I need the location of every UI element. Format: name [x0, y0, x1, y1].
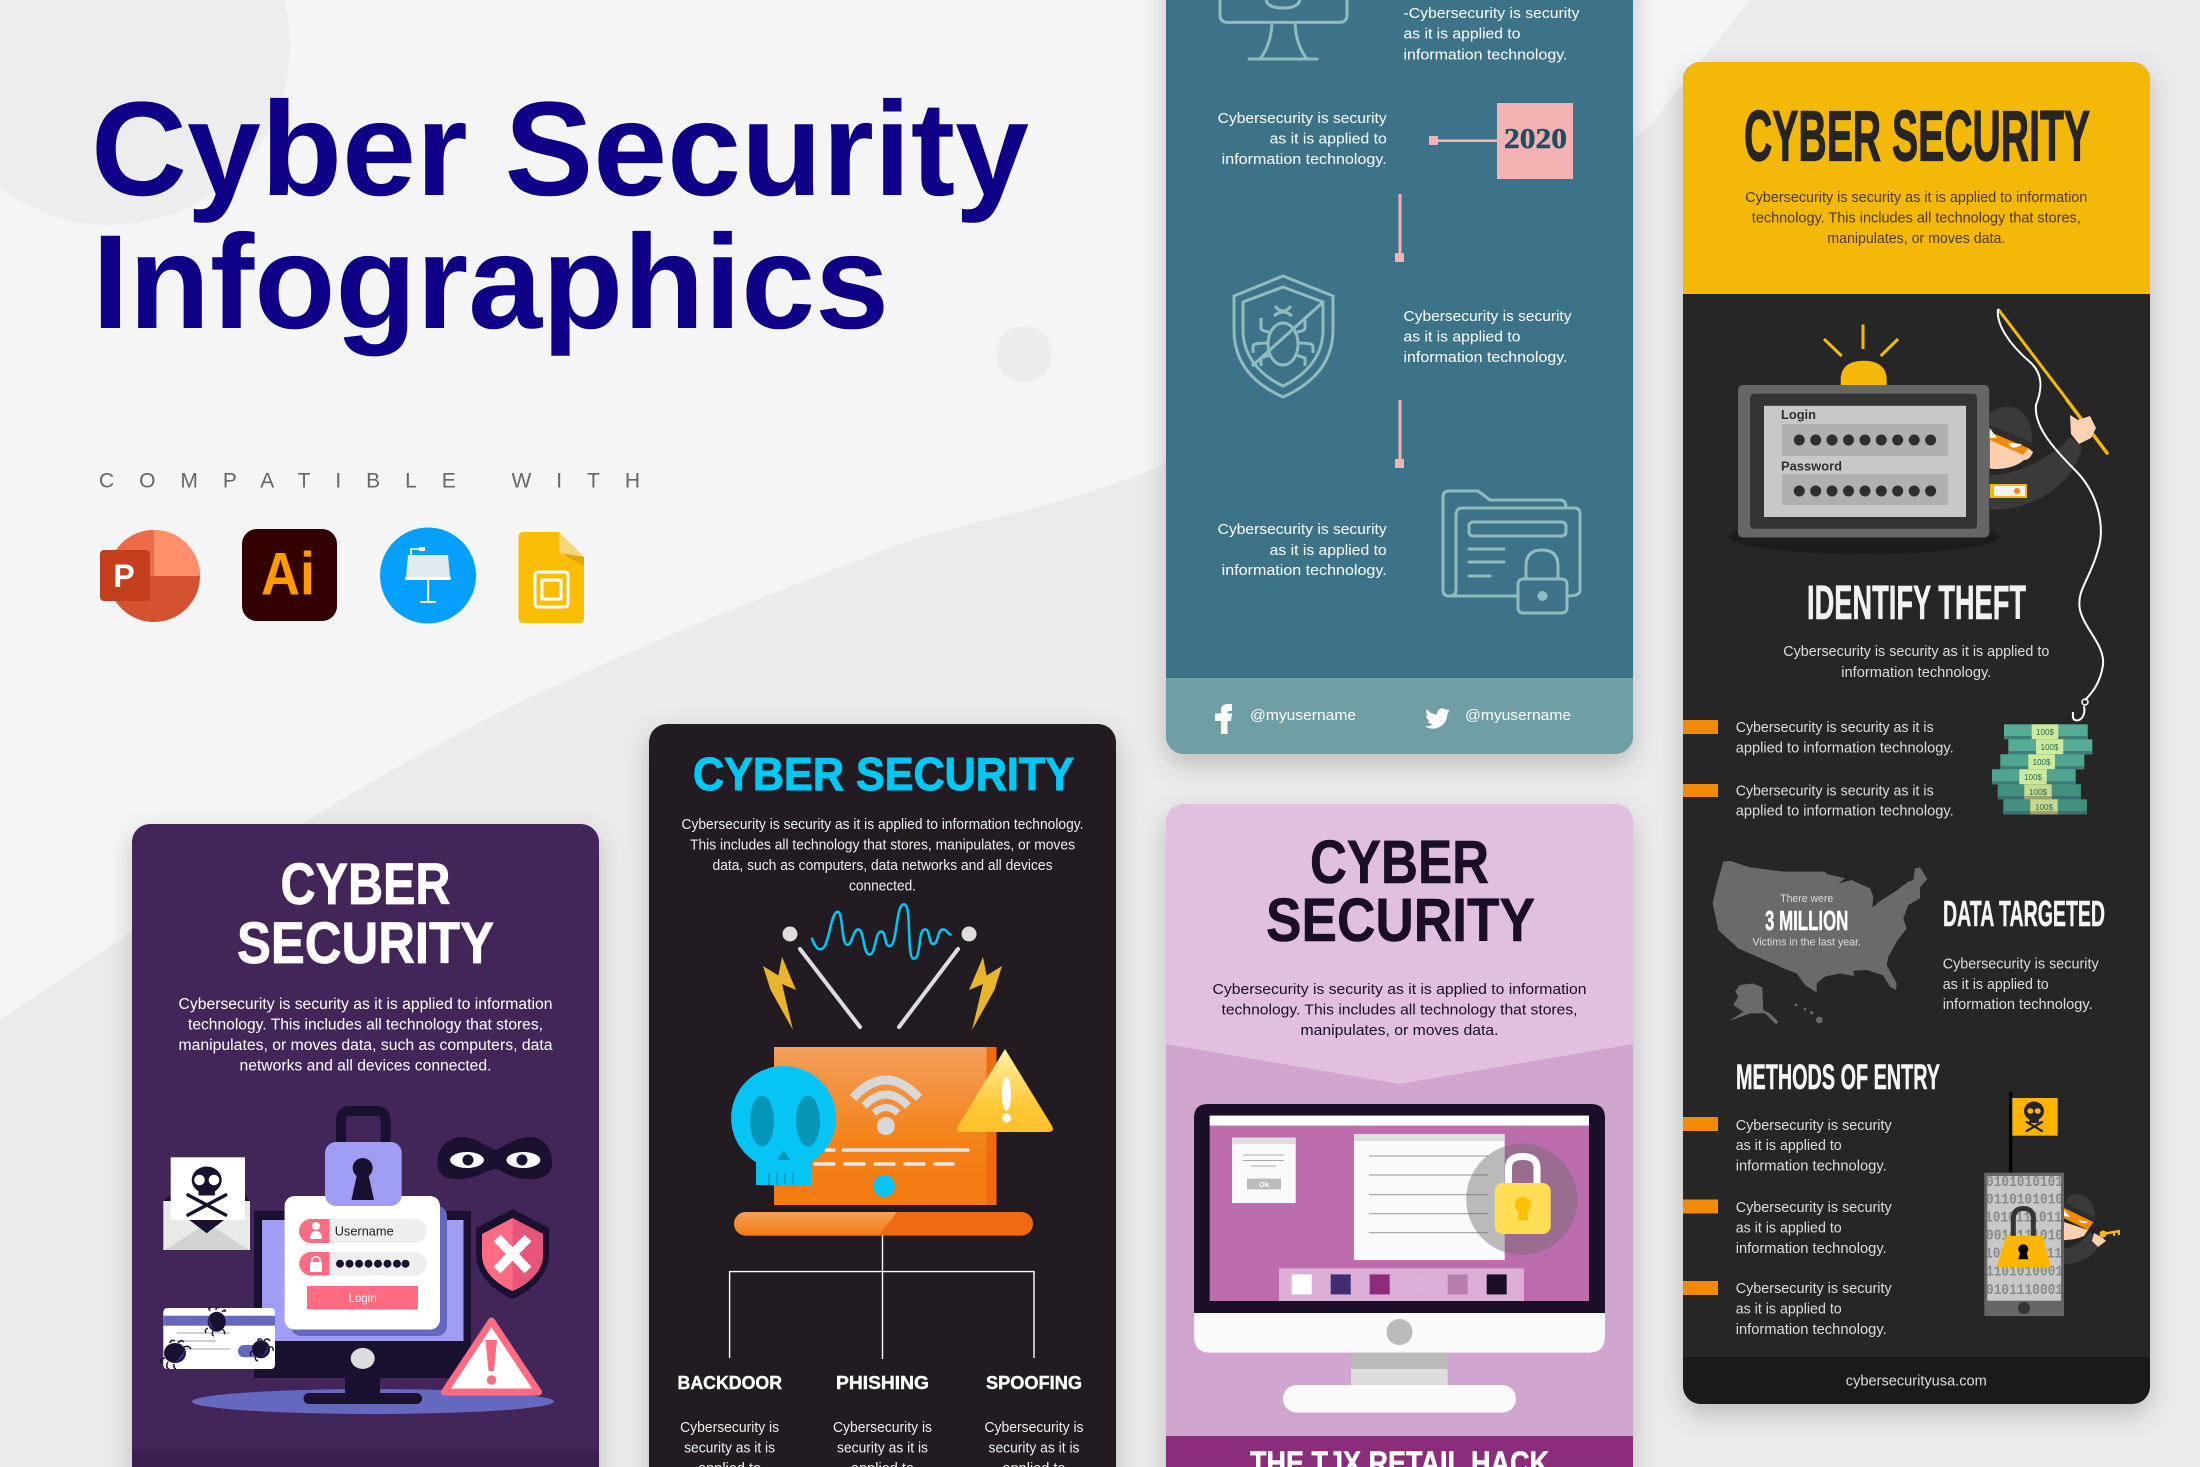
text: pink card intro: technology. This includes all technology that stores, — [1222, 1002, 1578, 1018]
bullet list: methods: information technology. — [1736, 1240, 1887, 1257]
icon: facebook — [1215, 704, 1232, 734]
illustration: locked phone: 0110101010 — [1986, 1192, 2063, 1208]
icon: PowerPoint — [100, 530, 200, 622]
column: phishing: security as it is — [837, 1441, 928, 1457]
illustration: money stacks: 100$ — [2040, 742, 2059, 752]
panel: pink card — [1166, 800, 1633, 1467]
icon: shield — [476, 1209, 549, 1299]
icon: Google Slides — [518, 532, 584, 623]
map: united states: Victims in the last year. — [1752, 937, 1861, 949]
text: pink card intro: Cybersecurity is security as it is applied to information — [1212, 981, 1586, 998]
text: data targeted — [1943, 956, 2099, 1013]
connector 1 — [1395, 194, 1404, 262]
bullet list: theft: applied to information technology. — [1736, 803, 1954, 820]
illustration: monitor with login — [192, 1111, 554, 1414]
text: teal step 3: information technology. — [1404, 350, 1568, 366]
illustration: locked phone: 0101010101 — [1986, 1175, 2063, 1191]
illustration: locked phone: 1010111111 — [1985, 1247, 2062, 1263]
icon: Illustrator: Ai — [261, 540, 315, 608]
text: purple card intro: networks and all devices connected. — [240, 1058, 492, 1074]
illustration: desktop monitor — [1194, 1104, 1605, 1413]
icon: Keynote — [380, 528, 476, 624]
window: document — [1354, 1134, 1505, 1260]
column: backdoor: security as it is — [684, 1441, 775, 1457]
text: pink card intro: manipulates, or moves data. — [1300, 1022, 1498, 1039]
text: twitter handle: @myusername — [1465, 708, 1571, 724]
illustration: login tablet: Password — [1781, 458, 1842, 474]
icon: warning triangle — [444, 1321, 538, 1392]
panel: teal card — [1166, 0, 1633, 758]
illustration: money stacks: 100$ — [2024, 772, 2042, 782]
text: teal step 2: Cybersecurity is security — [1218, 111, 1388, 127]
heading: dark card: CYBER SECURITY — [693, 748, 1074, 800]
dialog: ok box — [1232, 1138, 1296, 1203]
map: united states: 3 MILLION — [1765, 905, 1848, 936]
icon: locked folder — [1443, 491, 1580, 613]
icon: padlock — [1466, 1144, 1577, 1255]
compatible with label: COMPATIBLE WITH — [99, 470, 640, 492]
column: backdoor: BACKDOOR — [678, 1372, 782, 1393]
illustration: monitor with login: Username — [335, 1224, 394, 1239]
connector 2 — [1395, 400, 1404, 468]
illustration: money stacks: 100$ — [2032, 757, 2051, 767]
bullet list: methods: information technology. — [1736, 1158, 1887, 1175]
text: identify theft — [1783, 643, 2049, 681]
text: data targeted: information technology. — [1943, 996, 2093, 1013]
title — [91, 75, 1029, 357]
illustration: money stacks: 100$ — [2035, 802, 2053, 812]
column: spoofing — [984, 1372, 1084, 1467]
title: Cyber Security — [91, 75, 1029, 224]
heading: pink card: CYBER — [1310, 828, 1489, 896]
text: teal step 3: Cybersecurity is security — [1404, 309, 1572, 325]
text: yellow intro: technology. This includes all technology that stores, — [1752, 209, 2081, 226]
heading: pink card: SECURITY — [1266, 886, 1535, 954]
palette bar — [1279, 1268, 1524, 1301]
title: Infographics — [92, 208, 889, 357]
dialog: ok box: Ok — [1259, 1180, 1270, 1189]
text: teal step 4: information technology. — [1222, 563, 1387, 579]
icon: shield with bug — [1234, 276, 1333, 397]
icon: poison email — [163, 1157, 250, 1250]
bullet list: theft: applied to information technology. — [1736, 739, 1954, 756]
bullet list: methods: as it is applied to — [1736, 1300, 1842, 1317]
illustration: thief with key — [2064, 1194, 2120, 1264]
heading: methods of entry: METHODS OF ENTRY — [1736, 1058, 1940, 1097]
icon: yellow warning — [957, 1049, 1053, 1132]
bullet list: methods: Cybersecurity is security — [1736, 1199, 1892, 1216]
text: teal step 4 — [1218, 522, 1388, 579]
illustration: locked phone: 0010111010 — [1986, 1228, 2063, 1244]
bullet list: methods: Cybersecurity is security — [1736, 1280, 1892, 1297]
illustration: money stacks — [1992, 724, 2092, 814]
illustration: alarm light — [1824, 324, 1898, 385]
text: data targeted: as it is applied to — [1943, 976, 2049, 993]
text: data targeted: Cybersecurity is security — [1943, 956, 2099, 973]
illustration: locked phone — [1984, 1173, 2064, 1316]
text: dark card intro: data, such as computers, data networks and all devices — [712, 858, 1052, 874]
map: united states: There were — [1780, 893, 1833, 905]
column: backdoor: Cybersecurity is — [680, 1420, 779, 1436]
text: purple card intro — [178, 996, 553, 1074]
text: teal step 3 — [1404, 309, 1572, 366]
bullet list: methods: Cybersecurity is security — [1736, 1117, 1892, 1134]
icon: bandit mask — [437, 1137, 552, 1179]
map: united states — [1713, 861, 1927, 1024]
text: teal step 3: as it is applied to — [1404, 330, 1520, 346]
heading: identify theft: IDENTIFY THEFT — [1807, 577, 2026, 630]
text: dark card intro — [682, 817, 1084, 894]
panel: dark card — [649, 724, 1116, 1467]
text: teal step 1: as it is applied to — [1404, 27, 1520, 43]
text: identify theft: Cybersecurity is security as it is applied to — [1783, 643, 2049, 660]
year badge 2020: 2020 — [1504, 124, 1567, 155]
text: facebook handle: @myusername — [1250, 708, 1356, 724]
text: identify theft: information technology. — [1841, 664, 1991, 681]
heading: purple card: CYBER — [280, 852, 450, 917]
text: purple card intro: technology. This includes all technology that stores, — [188, 1016, 543, 1034]
icon: cyan skull — [731, 1066, 836, 1185]
illustration: login tablet: Login — [1781, 407, 1816, 422]
text: purple card intro: manipulates, or moves data, such as computers, data — [178, 1037, 553, 1054]
bullet list: methods: information technology. — [1736, 1321, 1887, 1338]
text: pink card intro — [1212, 981, 1586, 1039]
illustration: hacked laptop — [731, 1047, 1053, 1236]
text: dark card intro: connected. — [849, 878, 916, 894]
text: purple card intro: Cybersecurity is security as it is applied to information — [178, 996, 552, 1013]
heading: pink card — [1266, 828, 1535, 954]
bullet list: methods: as it is applied to — [1736, 1220, 1842, 1237]
year badge 2020 — [1429, 103, 1573, 179]
text: yellow intro — [1745, 189, 2087, 247]
text: teal step 1: -Cybersecurity is security — [1404, 6, 1580, 22]
text: teal step 1: information technology. — [1404, 48, 1568, 64]
text: teal step 1 — [1404, 6, 1580, 64]
column: spoofing: security as it is — [988, 1441, 1080, 1457]
text: yellow intro: manipulates, or moves data. — [1827, 230, 2005, 247]
text: teal step 4: Cybersecurity is security — [1218, 522, 1388, 538]
text: teal step 2: information technology. — [1222, 152, 1387, 168]
column: phishing: Cybersecurity is — [833, 1420, 932, 1436]
column: phishing — [833, 1372, 932, 1467]
diagram: branching lines — [730, 1235, 1034, 1359]
illustration: locked phone: 1101010001 — [1986, 1265, 2063, 1281]
illustration: locked phone: 1010111011 — [1985, 1211, 2062, 1227]
column: spoofing: Cybersecurity is — [984, 1420, 1084, 1436]
illustration: login tablet — [1729, 385, 1999, 554]
illustration: monitor with login: Login — [349, 1293, 377, 1305]
text: teal step 2 — [1218, 111, 1388, 168]
bullet list: methods — [1683, 1117, 1892, 1338]
icon: pirate flag — [2009, 1092, 2058, 1173]
bullet list: theft: Cybersecurity is security as it is — [1736, 719, 1934, 736]
text: yellow intro: Cybersecurity is security as it is applied to information — [1745, 189, 2087, 206]
bullet list: methods: as it is applied to — [1736, 1137, 1842, 1154]
column: phishing: PHISHING — [836, 1372, 929, 1393]
text: teal step 2: as it is applied to — [1270, 132, 1387, 148]
column: backdoor — [678, 1372, 782, 1467]
footer text: website: cybersecurityusa.com — [1846, 1374, 1987, 1390]
panel: purple card — [132, 824, 599, 1467]
illustration: signal wave and sparks — [763, 904, 1002, 1030]
illustration: money stacks: 100$ — [2036, 727, 2054, 737]
heading: purple card — [237, 852, 494, 976]
illustration: money stacks: 100$ — [2029, 787, 2047, 797]
icon: monitor outline — [1220, 0, 1347, 59]
illustration: locked phone: 0101110001 — [1986, 1283, 2063, 1299]
illustration: thief with fishing rod — [1990, 309, 2107, 720]
bullet list: theft: Cybersecurity is security as it is — [1736, 782, 1934, 800]
text: teal step 4: as it is applied to — [1270, 543, 1387, 559]
column: spoofing: SPOOFING — [986, 1372, 1082, 1393]
text: dark card intro: Cybersecurity is security as it is applied to information technology. — [682, 817, 1084, 833]
illustration: infected browser — [161, 1307, 275, 1369]
heading: purple card: SECURITY — [237, 911, 494, 976]
bullet list: theft — [1683, 719, 1954, 820]
text: dark card intro: This includes all technology that stores, manipulates, or moves — [690, 837, 1075, 853]
icon: twitter — [1425, 708, 1450, 729]
footer band: teal card — [1166, 678, 1633, 758]
icon: Illustrator — [242, 529, 337, 621]
icon: PowerPoint: P — [113, 558, 135, 594]
panel: yellow and dark card — [1683, 62, 2150, 1407]
